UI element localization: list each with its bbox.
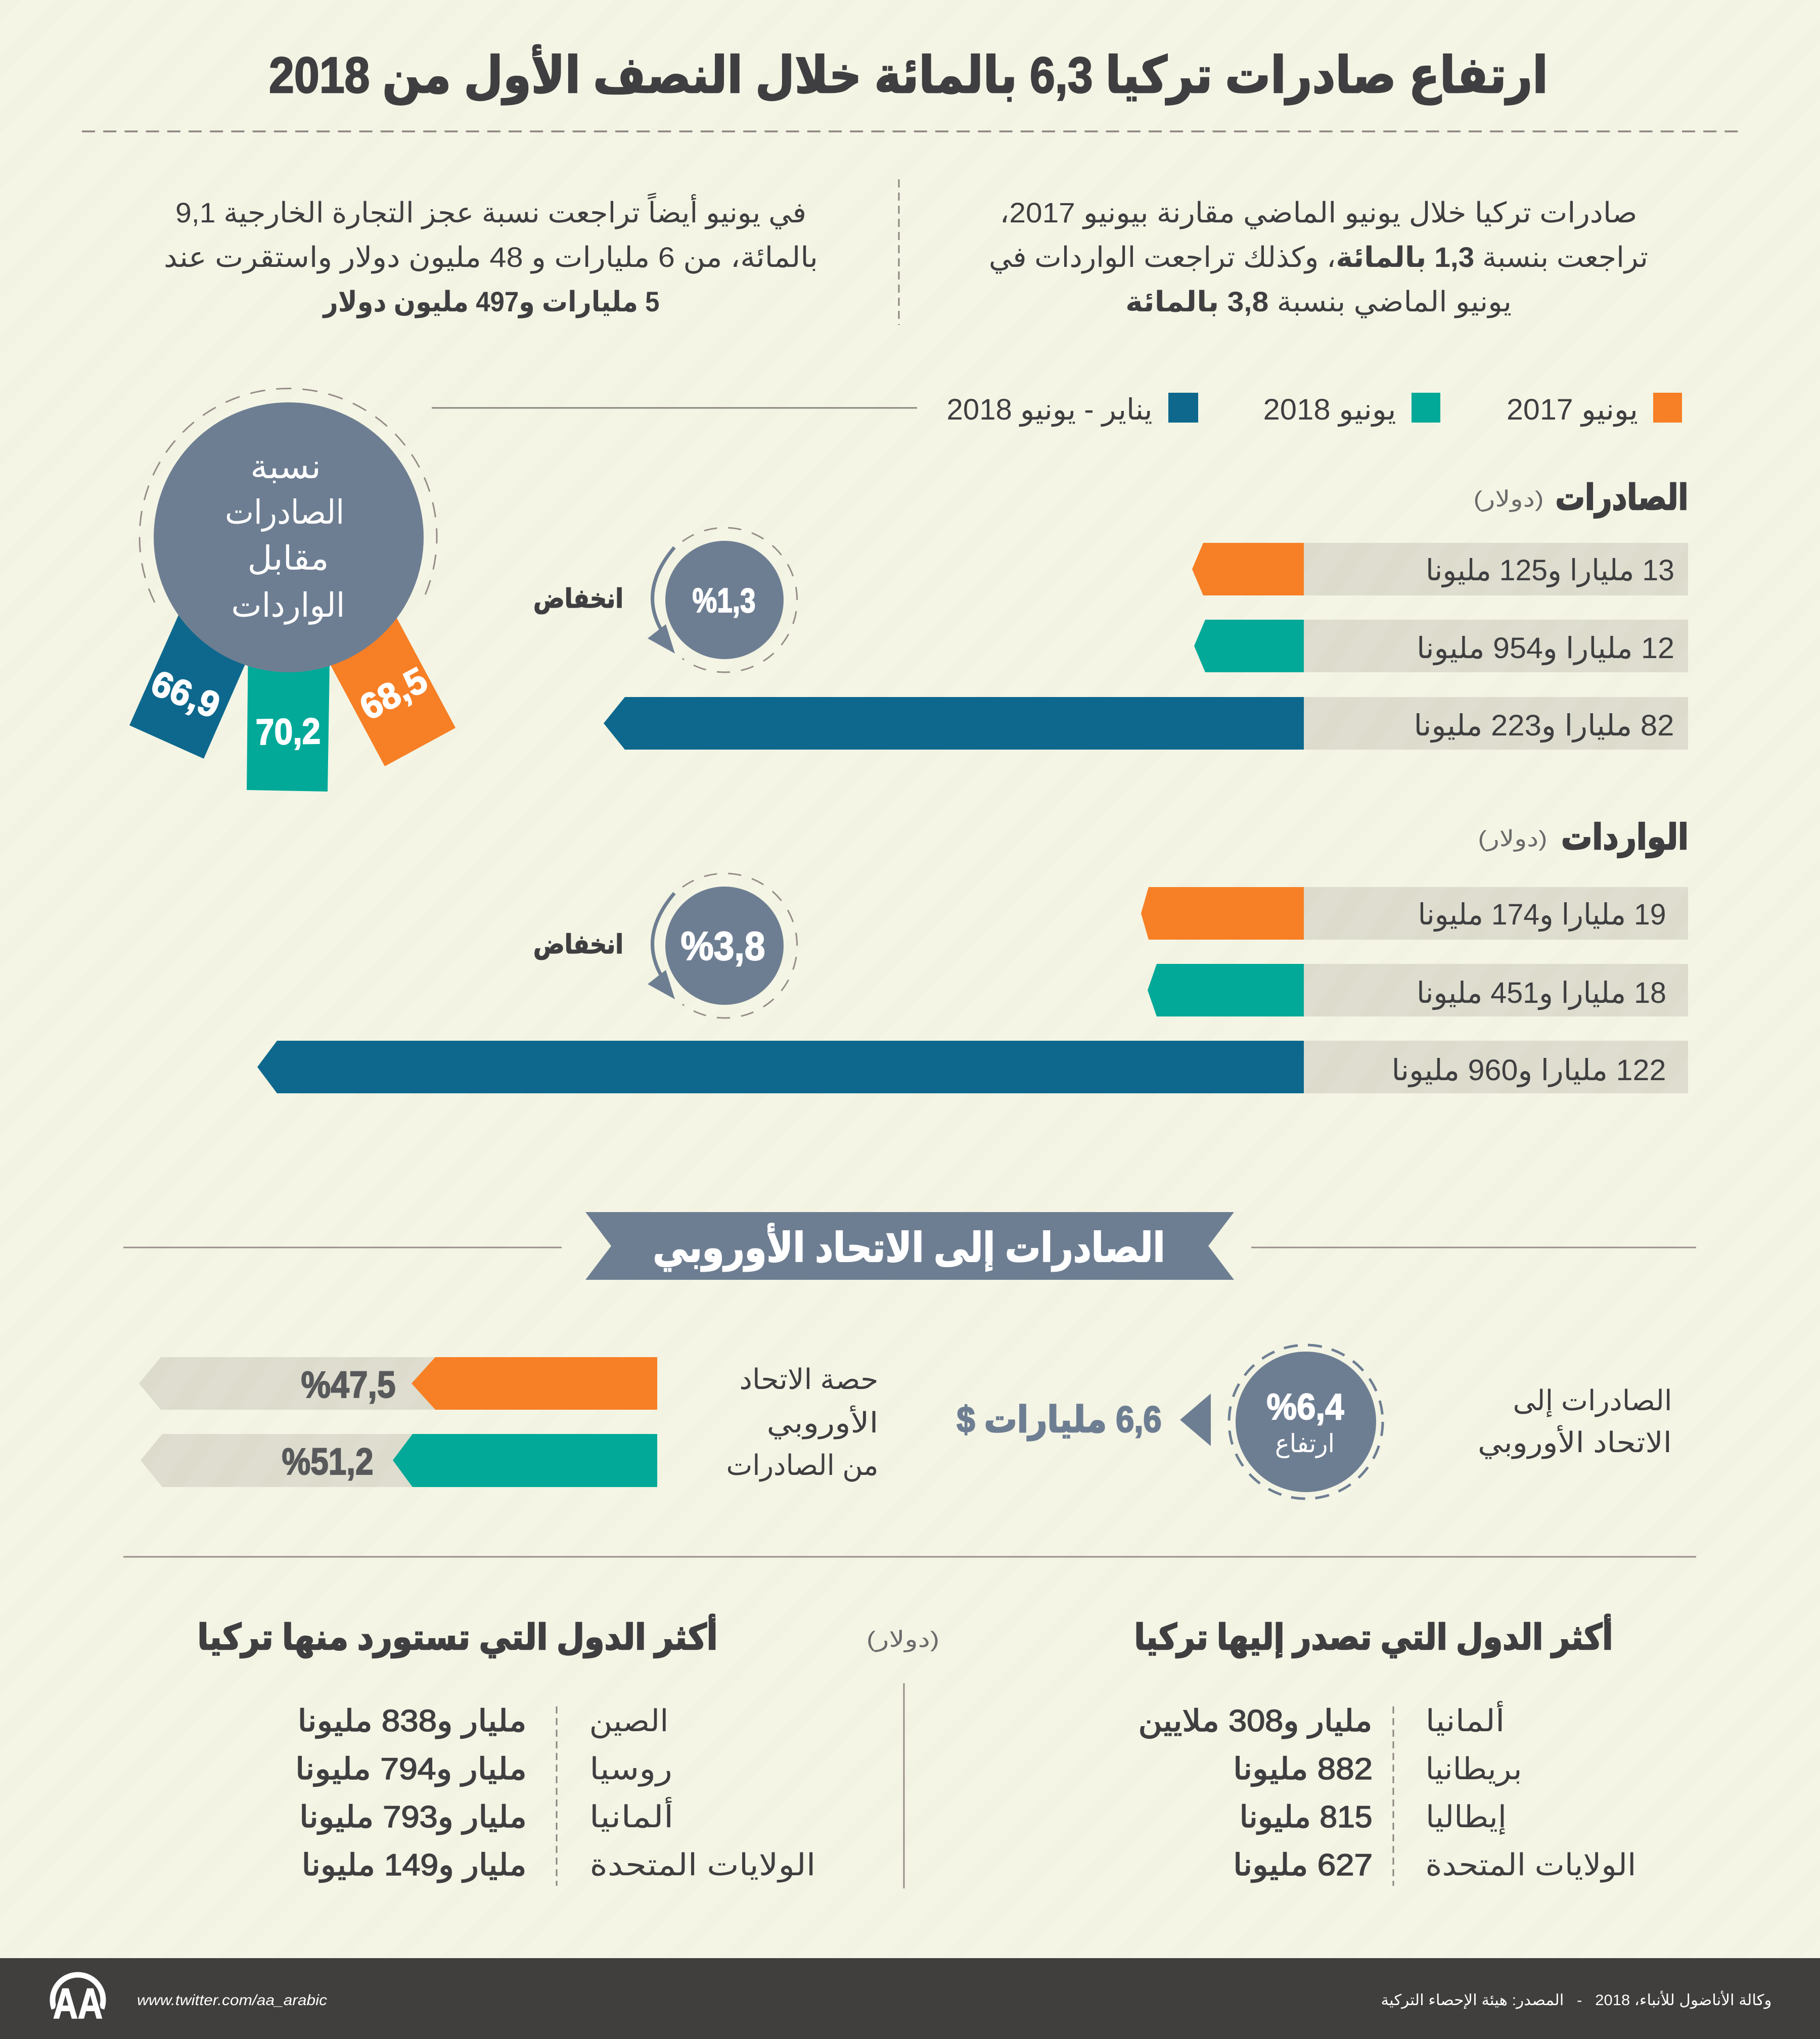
ribbon: 70,2: 70,2	[255, 711, 321, 753]
bar: exports June 2017: 13 مليارا و125 مليونا	[1426, 554, 1674, 588]
bar: EU share 51,2%	[141, 1434, 657, 1487]
section banner: exports to the EU: الصادرات إلى الاتحاد الأوروبي	[653, 1223, 1165, 1272]
table: top export destinations: الولايات المتحدة	[1426, 1848, 1636, 1883]
table: top import sources: مليار و149 مليونا	[301, 1848, 527, 1883]
intro text: exports and imports: يونيو الماضي بنسبة 3,8 بالمائة	[1125, 286, 1512, 318]
table: top import sources: مليار و838 مليونا	[297, 1704, 527, 1739]
heading: exports: الصادرات	[1555, 478, 1689, 518]
bar: imports June 2018	[1148, 964, 1688, 1016]
intro text: trade deficit	[164, 193, 818, 318]
bar: exports June 2018: 12 مليارا و954 مليونا	[1417, 632, 1674, 666]
ribbon: 66,9	[129, 615, 253, 759]
badge: exports decline 1,3%	[533, 528, 797, 672]
table: top export destinations: إيطاليا	[1426, 1800, 1507, 1835]
heading: top export destinations: أكثر الدول التي تصدر إليها تركيا	[1134, 1614, 1613, 1658]
legend item: January-June 2018: يناير - يونيو 2018	[946, 393, 1153, 427]
intro text: trade deficit: بالمائة، من 6 مليارات و 48 مليون دولار واستقرت عند	[164, 241, 818, 274]
heading: top import sources: أكثر الدول التي تستورد منها تركيا	[197, 1614, 718, 1658]
label: exports to the EU	[1478, 1384, 1672, 1459]
heading: imports: (دولار)	[1478, 826, 1547, 852]
bar: imports January-June 2018: 122 مليارا و960 مليونا	[1391, 1054, 1666, 1088]
intro text: trade deficit: 5 مليارات و497 مليون دولار	[322, 286, 659, 318]
arrow: value pointer	[1180, 1394, 1211, 1446]
imports chart	[257, 817, 1689, 1093]
table: top export destinations: 815 مليونا	[1240, 1800, 1372, 1835]
legend item: June 2017: يونيو 2017	[1507, 393, 1638, 427]
bar: imports January-June 2018	[257, 1041, 1688, 1093]
bar: EU share 47,5%	[139, 1357, 657, 1410]
arrow: decline	[648, 893, 675, 999]
table: top export destinations: 882 مليونا	[1233, 1752, 1373, 1787]
title: ارتفاع صادرات تركيا 6,3 بالمائة خلال النصف الأول من 2018	[269, 44, 1548, 105]
value: 6,6 billion dollars: 6,6 مليارات $	[957, 1400, 1162, 1441]
table: top export destinations: 627 مليونا	[1233, 1848, 1373, 1883]
logo: AA: AA	[53, 1980, 103, 2027]
table: top export destinations: بريطانيا	[1426, 1752, 1522, 1787]
heading: imports	[1478, 817, 1689, 858]
heading: exports: (دولار)	[1473, 487, 1544, 512]
ribbon: 66,9: 66,9	[146, 663, 225, 726]
intro text: exports and imports: صادرات تركيا خلال يونيو الماضي مقارنة بيونيو 2017،	[999, 197, 1637, 229]
exports chart	[604, 478, 1689, 750]
badge: rise 6,4%: ارتفاع	[1275, 1429, 1335, 1458]
label: exports to the EU: الاتحاد الأوروبي	[1478, 1425, 1672, 1459]
section banner: exports to the EU	[585, 1212, 1234, 1280]
badge: rise 6,4%: %6,4	[1267, 1387, 1344, 1427]
bar: EU share 47,5%: %47,5	[301, 1364, 395, 1406]
bar: exports January-June 2018: 82 مليارا و223 مليونا	[1414, 709, 1674, 743]
bar: exports January-June 2018	[604, 697, 1688, 750]
bar: imports June 2017	[1141, 887, 1688, 940]
table: top import sources: الولايات المتحدة	[589, 1848, 816, 1883]
ribbon: 68,5: 68,5	[353, 660, 434, 728]
table: top import sources: الصين	[589, 1704, 668, 1739]
table: top export destinations	[1139, 1701, 1636, 1886]
badge: exports decline 1,3%: %1,3	[693, 581, 755, 620]
label: EU share of exports: حصة الاتحاد	[739, 1363, 879, 1395]
footer	[0, 1958, 1820, 2039]
bar: exports June 2017	[1192, 543, 1688, 595]
badge: rise 6,4%	[1229, 1345, 1383, 1499]
arrow: decline	[648, 547, 675, 654]
medal caption: الصادرات	[225, 493, 344, 532]
label: EU share of exports	[726, 1363, 879, 1482]
table: top import sources: مليار و793 مليونا	[299, 1800, 527, 1835]
ribbon: 68,5	[324, 618, 456, 766]
intro text: exports and imports	[989, 197, 1648, 318]
table: top import sources: ألمانيا	[589, 1797, 673, 1834]
legend	[432, 393, 1682, 427]
ribbon: 70,2	[247, 632, 330, 792]
label: EU share of exports: الأوروبي	[766, 1405, 879, 1440]
legend item: June 2018: يونيو 2018	[1263, 393, 1396, 427]
table: top export destinations: ألمانيا	[1426, 1701, 1505, 1738]
medal caption: مقابل	[248, 539, 329, 577]
footer source: وكالة الأناضول للأنباء، 2018 - المصدر: هيئة الإحصاء التركية	[1381, 1990, 1771, 2009]
heading: exports	[1473, 478, 1689, 518]
bar: EU share 51,2%: %51,2	[282, 1441, 373, 1482]
heading: imports: الواردات	[1561, 817, 1689, 858]
table: top import sources: مليار و794 مليونا	[295, 1752, 527, 1787]
badge: exports decline 1,3%: انخفاض	[533, 584, 623, 614]
table: top export destinations: مليار و308 ملايين	[1139, 1704, 1372, 1739]
table: top import sources	[295, 1704, 816, 1886]
table: top import sources: روسيا	[589, 1752, 672, 1787]
note: in dollars: (دولار)	[867, 1627, 939, 1652]
medal caption: نسبة	[250, 448, 321, 485]
medal: exports vs imports ratio	[129, 389, 456, 792]
footer link: www.twitter.com/aa_arabic	[137, 1992, 327, 2009]
badge: imports decline 3,8%: انخفاض	[533, 930, 623, 960]
bar: imports June 2017: 19 مليارا و174 مليونا	[1418, 898, 1666, 932]
intro text: exports and imports: تراجعت بنسبة 1,3 بالمائة، وكذلك تراجعت الواردات في	[989, 241, 1648, 274]
logo: AA: AA	[53, 1980, 103, 2027]
medal caption	[225, 448, 345, 625]
label: exports to the EU: الصادرات إلى	[1513, 1384, 1672, 1418]
badge: imports decline 3,8%	[533, 873, 797, 1018]
badge: imports decline 3,8%: %3,8	[680, 923, 765, 968]
intro text: trade deficit: في يونيو أيضاً تراجعت نسبة عجز التجارة الخارجية 9,1	[175, 193, 806, 229]
bar: exports June 2018	[1194, 620, 1688, 672]
label: EU share of exports: من الصادرات	[726, 1449, 879, 1482]
bar: imports June 2018: 18 مليارا و451 مليونا	[1417, 977, 1666, 1010]
medal caption: الواردات	[232, 586, 345, 625]
